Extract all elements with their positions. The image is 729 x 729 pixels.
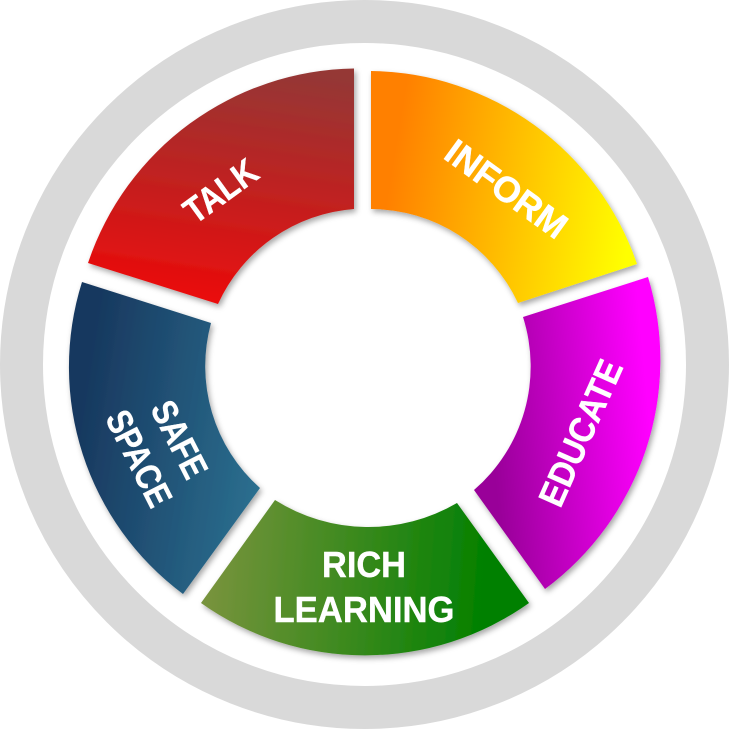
segment: TALK: TALK	[175, 150, 266, 232]
segment: SAFE SPACE: SAFE	[143, 393, 216, 485]
segment: RICH LEARNING: RICH	[322, 544, 406, 585]
segment: EDUCATE: EDUCATE	[530, 353, 631, 513]
segment: EDUCATE	[474, 277, 660, 589]
segment: RICH LEARNING	[201, 500, 529, 655]
segment: SAFE SPACE	[69, 282, 260, 594]
segment: TALK	[88, 68, 354, 304]
segment: INFORM	[371, 71, 637, 303]
segment: SAFE SPACE: SPACE	[97, 403, 181, 514]
segment: RICH LEARNING: LEARNING	[274, 589, 454, 630]
segment: INFORM: INFORM	[437, 131, 575, 247]
